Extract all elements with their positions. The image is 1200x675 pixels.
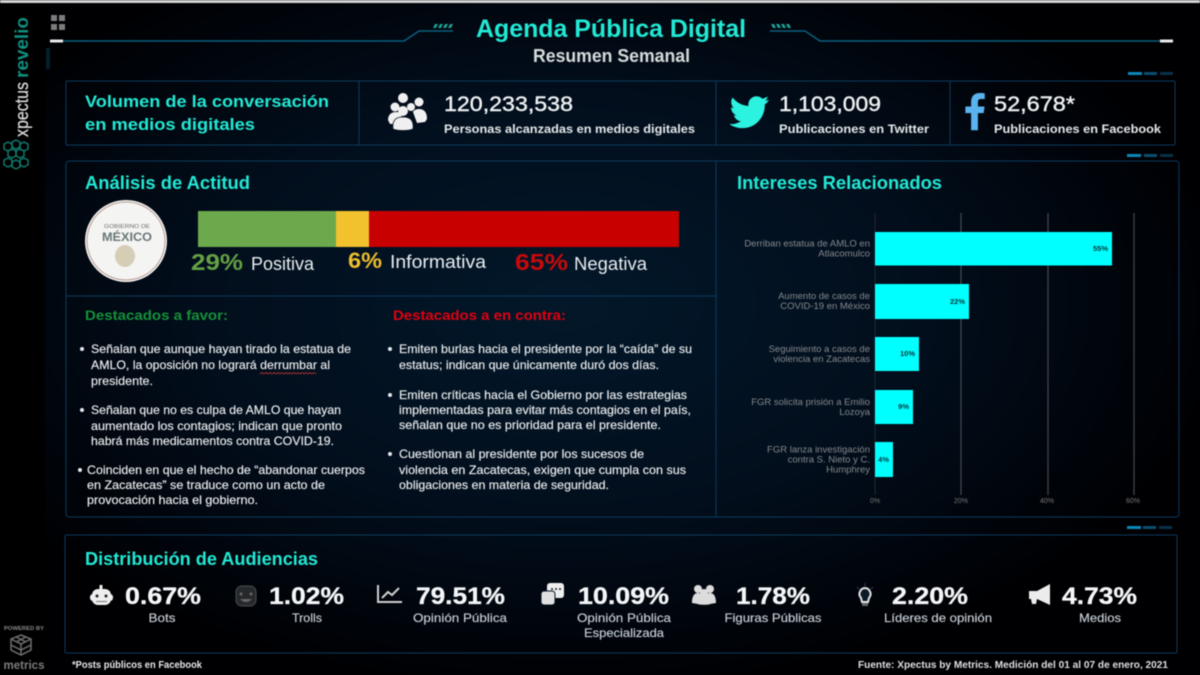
stacked bar: actitud: [198, 211, 679, 247]
icon: twitter: [730, 97, 768, 128]
label: negativa: [515, 249, 648, 275]
stat: medios: [1029, 583, 1137, 625]
column: destacados a favor: AMLO, la oposición no logrará derrumbar al: [91, 358, 330, 372]
column: destacados a favor: presidente.: [91, 374, 153, 388]
icon: facebook: [965, 93, 985, 130]
panel: volumen de la conversación: [66, 81, 1175, 145]
column: destacados en contra: Emiten críticas hacia el Gobierno por las estrategias: [399, 388, 687, 402]
column: destacados a favor: en Zacatecas” se traduce como un acto de: [87, 478, 325, 492]
stat: facebook: Publicaciones en Facebook: [994, 122, 1161, 136]
bar: derriban estatua: Derriban estatua de AMLO en: [744, 238, 870, 250]
bar: fgr lozoya: 9%: [898, 402, 909, 411]
stat: bots: [90, 583, 201, 625]
stat: opinión pública: 79.51%: [416, 583, 505, 610]
header line left: [50, 24, 453, 42]
bar: derriban estatua: Atlacomulco: [818, 248, 870, 260]
heading: análisis de actitud: Análisis de Actitud: [85, 173, 250, 193]
sidebar brand: powered by metrics: [4, 626, 45, 672]
stat: líderes de opinión: 2.20%: [892, 583, 968, 610]
stat: trolls: [236, 583, 344, 625]
column: destacados en contra: violencia en Zacatecas, exigen que cumpla con sus: [399, 463, 686, 477]
sidebar brand: xpectus revelio: revelio: [12, 17, 32, 78]
column: destacados a favor: habrá más medicamentos contra COVID-19.: [91, 434, 334, 448]
stat: figuras públicas: [692, 583, 822, 625]
column: destacados a favor: Coinciden en que el hecho de “abandonar cuerpos: [87, 463, 365, 477]
title: Agenda Pública Digital: [476, 15, 746, 43]
stat: medios: Medios: [1079, 611, 1121, 625]
column: destacados a favor: [78, 307, 365, 507]
column: destacados en contra: Destacados a en contra:: [393, 307, 566, 323]
source: Fuente: Xpectus by Metrics. Medición del 01 al 07 de enero, 2021: [858, 660, 1168, 671]
stat: figuras públicas: 1.78%: [736, 583, 810, 610]
heading: volumen: en medios digitales: [85, 115, 255, 134]
stat: líderes de opinión: [857, 583, 992, 625]
column: destacados en contra: Emiten burlas hacia el presidente por la “caída” de su: [399, 342, 692, 356]
stat: personas alcanzadas: Personas alcanzadas en medios digitales: [444, 122, 695, 136]
bar: seguimiento violencia: violencia en Zacatecas: [773, 354, 870, 365]
stat: trolls: Trolls: [292, 611, 322, 625]
column: destacados a favor: Señalan que aunque hayan tirado la estatua de: [91, 342, 351, 356]
bar chart: intereses relacionados: [744, 213, 1140, 505]
label: informativa: Informativa: [390, 252, 487, 272]
axis labels: 20%: [954, 498, 968, 505]
footnote: *Posts públicos en Facebook: [72, 660, 202, 671]
icon: people: [388, 93, 427, 130]
heading: distribución: Distribución de Audiencias: [85, 549, 318, 569]
sidebar brand: powered by metrics: metrics: [4, 658, 45, 672]
stat: bots: Bots: [148, 611, 176, 625]
label: positiva: 29%: [191, 249, 243, 275]
label: informativa: 6%: [348, 248, 382, 273]
stat: opinión pública especializada: Opinión Pública: [577, 611, 671, 625]
bar: fgr lozoya: FGR solicita prisión a Emilio: [751, 397, 870, 408]
icon: header grid: [51, 15, 65, 30]
column: destacados en contra: Cuestionan al presidente por los sucesos de: [399, 447, 644, 461]
bar: fgr investigación: contra S. Nieto y C.: [788, 454, 870, 466]
stat: bots: 0.67%: [125, 583, 201, 610]
subtitle: Resumen Semanal: [533, 46, 690, 66]
logo: gobierno de méxico: [85, 200, 167, 282]
bar: aumento de casos: [778, 284, 969, 319]
label: informativa: [348, 248, 487, 273]
bar: fgr investigación: 4%: [878, 455, 889, 464]
heading: volumen: [85, 92, 329, 134]
stat: facebook: 52,678*: [994, 93, 1075, 116]
bar: seguimiento violencia: Seguimiento a casos de: [769, 344, 870, 355]
heading: intereses relacionados: Intereses Relacionados: [737, 173, 942, 193]
logo: gobierno de méxico: MÉXICO: [102, 229, 152, 244]
label: negativa: 65%: [515, 249, 568, 275]
column: destacados en contra: obligaciones en materia de seguridad.: [399, 478, 609, 492]
stat: twitter: Publicaciones en Twitter: [779, 122, 929, 136]
logo: gobierno de méxico: GOBIERNO DE: [104, 224, 150, 230]
stat: facebook: [994, 93, 1161, 136]
label: negativa: Negativa: [574, 254, 648, 274]
bar: derriban estatua: 55%: [1093, 244, 1108, 253]
bar: fgr lozoya: Lozoya: [839, 407, 871, 418]
stat: trolls: 1.02%: [269, 583, 344, 610]
bar: fgr investigación: Humphrey: [826, 464, 870, 476]
bar: fgr investigación: FGR lanza investigación: [767, 444, 870, 456]
bar: aumento de casos: Aumento de casos de: [778, 291, 870, 302]
sidebar brand: xpectus revelio: [4, 17, 32, 169]
column: destacados a favor: Señalan que no es culpa de AMLO que hayan: [91, 403, 341, 417]
stat: figuras públicas: Figuras Públicas: [724, 611, 822, 625]
axis labels: 40%: [1040, 498, 1054, 505]
axis labels: 60%: [1126, 498, 1140, 505]
stat: opinión pública especializada: [541, 583, 671, 640]
decorative dashes: [1127, 72, 1173, 529]
header line right: [770, 24, 1173, 42]
bar: aumento de casos: 22%: [950, 297, 965, 306]
stat: medios: 4.73%: [1062, 583, 1137, 610]
stat: twitter: [779, 93, 929, 136]
bar: aumento de casos: COVID-19 en México: [780, 301, 870, 312]
stat: opinión pública: Opinión Pública: [413, 611, 507, 625]
stat: opinión pública: [378, 583, 507, 625]
bar: fgr lozoya: [751, 390, 913, 424]
stat: opinión pública especializada: Especializada: [584, 626, 664, 640]
bar: fgr investigación: [767, 442, 893, 477]
stat: twitter: 1,103,009: [779, 93, 881, 116]
axis labels: 0%: [870, 498, 880, 505]
bar: derriban estatua: [744, 232, 1112, 266]
column: destacados en contra: estatus; indican que únicamente duró dos días.: [399, 358, 659, 372]
column: destacados en contra: implementadas para evitar más contagios en el país,: [399, 403, 691, 417]
stat: personas alcanzadas: 120,233,538: [444, 93, 573, 116]
column: destacados a favor: aumentado los contagios; indican que pronto: [91, 419, 342, 433]
panel: análisis e intereses: [66, 161, 1179, 517]
label: positiva: Positiva: [251, 254, 315, 274]
bar: seguimiento violencia: 10%: [900, 349, 915, 358]
panel: distribución de audiencias: [65, 535, 1177, 653]
axis labels: [870, 498, 1140, 505]
column: destacados en contra: [388, 307, 692, 492]
sidebar brand: xpectus revelio: xpectus: [12, 82, 32, 137]
label: positiva: [191, 249, 315, 275]
column: destacados en contra: señalan que no es prioridad para el presidente.: [399, 418, 661, 432]
column: destacados a favor: provocación hacia el gobierno.: [87, 493, 258, 507]
column: destacados a favor: Destacados a favor:: [85, 307, 228, 323]
stat: personas alcanzadas: [444, 93, 695, 136]
bar: seguimiento violencia: [769, 337, 919, 371]
heading: volumen: Volumen de la conversación: [85, 92, 329, 111]
stat: opinión pública especializada: 10.09%: [578, 583, 669, 610]
stat: líderes de opinión: Líderes de opinión: [884, 611, 992, 625]
sidebar brand: powered by metrics: POWERED BY: [4, 626, 44, 632]
